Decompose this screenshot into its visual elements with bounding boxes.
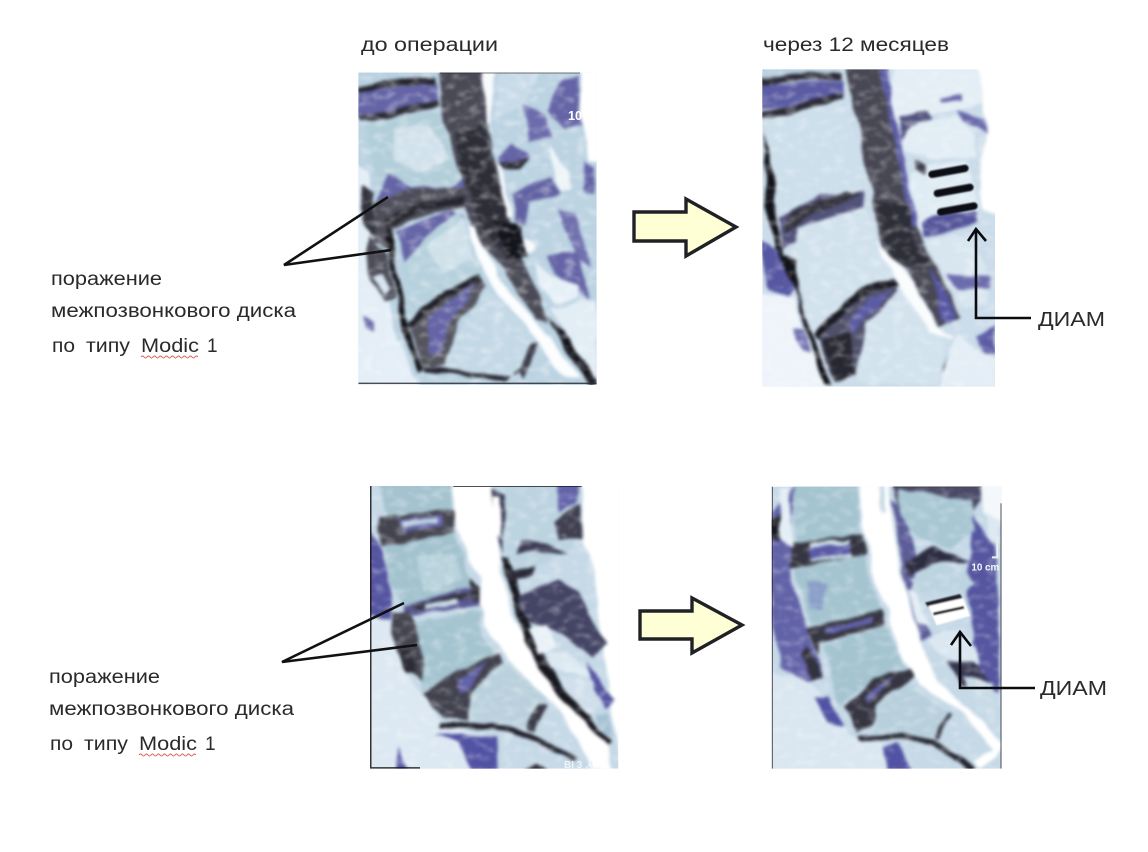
- label: top Modic lesion: по: [52, 336, 75, 357]
- big arrow: top: [634, 199, 736, 256]
- big arrow: bottom: [640, 598, 742, 653]
- label: top Modic lesion: поражение: [51, 269, 162, 290]
- scan edges: [358, 73, 597, 383]
- label: bottom Modic lesion: межпозвонкового диска: [49, 699, 294, 720]
- DIAM arrow: top: [968, 229, 1031, 318]
- MRI panel: top right, after 12 months: [762, 69, 995, 387]
- scan edges: [772, 487, 1001, 769]
- heading: after 12 months: через 12 месяцев: [763, 35, 949, 56]
- pointer lines: top lesion: [284, 197, 391, 265]
- scale mark 10 cm: [972, 536, 999, 570]
- label: bottom Modic lesion: [49, 667, 294, 756]
- label: top Modic lesion: Modic: [141, 336, 199, 357]
- faint scan label: BI 3 .4: [564, 760, 594, 771]
- label: top Modic lesion: [51, 269, 296, 358]
- label: DIAM top: ДИАМ: [1038, 309, 1105, 331]
- DIAM implant: dark bars: [932, 168, 974, 212]
- label: top Modic lesion: межпозвонкового диска: [51, 301, 296, 322]
- label: DIAM bottom: ДИАМ: [1040, 678, 1107, 700]
- heading: before surgery: до операции: [361, 35, 498, 56]
- label: bottom Modic lesion: типу: [84, 734, 129, 755]
- DIAM arrow: bottom: [951, 632, 1035, 688]
- label: bottom Modic lesion: 1: [205, 734, 216, 755]
- pointer lines: bottom lesion: [282, 603, 417, 662]
- scale mark 10 cm: 10 cm: [971, 563, 999, 574]
- label: bottom Modic lesion: Modic: [139, 734, 197, 755]
- label: top Modic lesion: 1: [207, 336, 218, 357]
- scale mark 10: 10: [568, 109, 582, 123]
- label: bottom Modic lesion: по: [50, 734, 73, 755]
- label: bottom Modic lesion: поражение: [49, 667, 160, 688]
- DIAM implant: white bars: [925, 594, 970, 625]
- scan edges: [370, 486, 582, 769]
- MRI panel: bottom left, before surgery: [370, 486, 618, 769]
- MRI panel: top left, before surgery: [358, 72, 597, 385]
- label: top Modic lesion: типу: [86, 336, 131, 357]
- MRI panel: bottom right, after 12 months: [767, 480, 1010, 777]
